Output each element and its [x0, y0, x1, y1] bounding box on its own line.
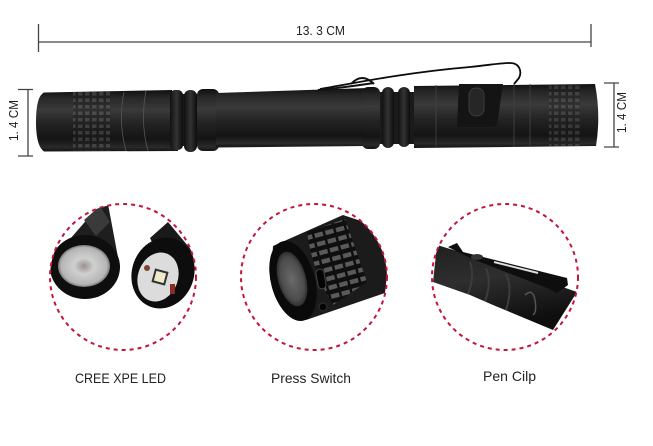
tail cap	[36, 90, 178, 152]
switch cutout	[457, 84, 503, 127]
left diameter dimension: 1.4 CM	[6, 90, 33, 156]
label: Press Switch	[271, 370, 351, 386]
right diameter dimension: 1.4 CM: 1. 4 CM	[614, 92, 629, 133]
label: Pen Cilp	[483, 368, 536, 384]
rear grooves	[170, 89, 219, 152]
length dimension: 13.3 CM: 13. 3 CM	[296, 23, 345, 38]
dashed ring	[432, 204, 578, 350]
head knurling	[549, 85, 580, 146]
photo: LED parts	[50, 206, 195, 308]
left diameter dimension: 1.4 CM: 1. 4 CM	[6, 100, 21, 141]
flashlight	[36, 63, 598, 152]
groove core	[160, 92, 420, 146]
head	[414, 84, 598, 148]
main barrel	[216, 88, 368, 148]
tail knurling	[73, 92, 110, 151]
length dimension: 13.3 CM	[38, 23, 591, 52]
photo: switch end cap	[269, 215, 387, 321]
front grooves	[362, 87, 410, 149]
infographic	[9, 24, 626, 384]
label: CREE XPE LED	[75, 370, 166, 386]
photo: pen clip	[433, 243, 577, 330]
pen clip	[320, 63, 520, 89]
detail: Press Switch	[241, 204, 388, 386]
right diameter dimension: 1.4 CM	[604, 83, 629, 147]
detail: Pen Clip	[432, 204, 578, 384]
dashed ring	[241, 204, 387, 350]
dashed ring	[50, 204, 196, 350]
detail: CREE XPE LED	[50, 204, 204, 386]
